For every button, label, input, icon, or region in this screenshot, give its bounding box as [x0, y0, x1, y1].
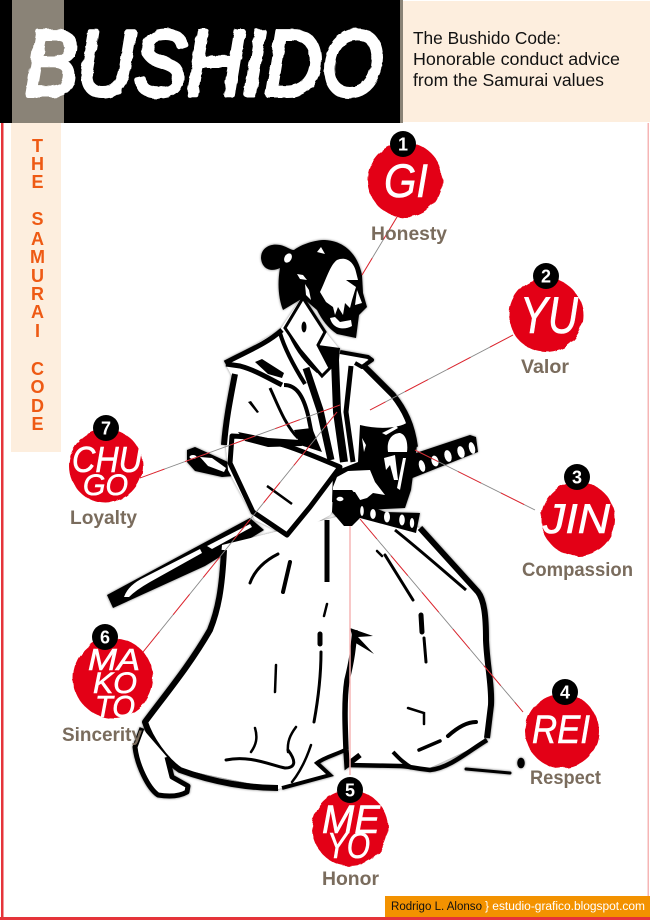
lapel strips: [280, 333, 305, 384]
nose highlight: [355, 290, 362, 305]
shoulder under-edge: [226, 364, 282, 385]
value 6: sincerity: 6: [100, 628, 110, 648]
label valor: Valor: [521, 356, 569, 378]
badge 4: [552, 679, 578, 705]
name rei: REI: [532, 708, 590, 752]
seal 2: [509, 278, 583, 352]
label sincerity: Sincerity: [62, 724, 142, 746]
label compassion: Compassion: [522, 559, 633, 581]
sleeve: [230, 432, 340, 535]
subtitle text: [413, 28, 620, 90]
connector lines: [140, 217, 535, 775]
label honor: Honor: [322, 868, 379, 890]
subtitle text: Honorable conduct advice: [413, 49, 620, 69]
face: [320, 259, 358, 315]
name me yo: ME: [322, 798, 381, 842]
hair highlights: [282, 252, 294, 264]
header banner: [0, 0, 400, 123]
badge 1: [390, 131, 416, 157]
value 6: sincerity: [62, 624, 153, 746]
subtitle text: from the Samurai values: [413, 70, 604, 90]
name makoto: MA: [88, 642, 140, 677]
head and hair: [261, 240, 367, 338]
value 4: respect: [525, 679, 601, 789]
value 2: valor: 2: [541, 266, 551, 286]
value 5: honor: [312, 777, 388, 890]
waist band: [332, 492, 420, 533]
seal 5: [312, 790, 388, 866]
samurai figure: [107, 240, 524, 796]
vertical title letters: H: [31, 154, 44, 174]
vertical panel: the samurai code: [11, 123, 61, 452]
inner fold: [270, 388, 298, 438]
black forearm: [332, 422, 417, 510]
vertical title letters: E: [31, 172, 44, 192]
left sword handle: [187, 447, 234, 477]
subtitle text: The Bushido Code:: [413, 28, 561, 48]
name makoto: [88, 642, 140, 724]
vertical title letters: R: [31, 284, 44, 304]
name chu go: [72, 439, 143, 502]
value 7: loyalty: 7: [101, 418, 111, 438]
subtitle panel: [400, 0, 650, 123]
label loyalty: Loyalty: [70, 507, 137, 529]
right lapel strip: [346, 366, 353, 462]
sheathed sword: [107, 518, 264, 608]
robe black folds: [248, 345, 340, 452]
vertical title letters: A: [31, 302, 44, 322]
author: Rodrigo L. Alonso: [391, 901, 482, 913]
hakama trousers: [135, 515, 524, 796]
label honesty: Honesty: [371, 223, 447, 245]
name me yo: YO: [327, 825, 370, 866]
badge 6: [92, 624, 118, 650]
value 3: compassion: 3: [572, 468, 582, 488]
centre diagonal strip: [306, 368, 331, 460]
badge 7: [93, 415, 119, 441]
seal 6: [73, 638, 153, 718]
name chu go: CHU: [72, 439, 143, 480]
seal 3: [541, 482, 615, 556]
right sword hilt: [410, 435, 478, 479]
value 1: honesty: 1: [398, 134, 408, 154]
name yu: YU: [520, 287, 578, 345]
footer credit: [385, 896, 650, 917]
chin highlight: [330, 317, 352, 328]
vertical title letters: E: [31, 414, 44, 434]
seal 1: [368, 142, 442, 218]
name chu go: GO: [83, 469, 128, 502]
name makoto: KO: [93, 667, 137, 700]
arm highlights: [362, 426, 407, 490]
name gi: GI: [384, 154, 428, 207]
grey brush band: [12, 0, 64, 123]
vertical title letters: A: [31, 229, 44, 249]
fold marks: [226, 551, 524, 782]
value 5: honor: 5: [345, 780, 355, 800]
vertical title letters: S: [31, 209, 44, 229]
robe outlines: [224, 330, 415, 462]
name jin: JIN: [542, 495, 611, 542]
hand: [333, 470, 385, 500]
value 4: respect: 4: [560, 682, 570, 702]
value 2: valor: [509, 263, 583, 378]
chest strip: [335, 360, 344, 462]
name me yo: [322, 798, 381, 866]
vertical title letters: O: [30, 377, 45, 397]
website: } estudio-grafico.blogspot.com: [485, 901, 645, 913]
vertical title letters: U: [31, 266, 44, 286]
neck: [285, 298, 330, 376]
badge 5: [337, 777, 363, 803]
value 7: loyalty: [69, 415, 143, 529]
vertical title letters: D: [31, 396, 44, 416]
neck mark: [302, 322, 306, 332]
name makoto: TO: [95, 689, 135, 724]
foot: [135, 728, 188, 796]
badge 3: [564, 464, 590, 490]
vertical title letters: T: [32, 136, 43, 156]
label respect: Respect: [530, 767, 601, 789]
title: BUSHIDO: [25, 13, 383, 115]
value 3: compassion: [522, 464, 633, 581]
value 1: honesty: [368, 131, 447, 245]
badge 2: [533, 263, 559, 289]
robe torso: [225, 300, 415, 537]
seal 7: [69, 429, 143, 503]
vertical title letters: I: [35, 321, 40, 341]
vertical title letters: C: [31, 359, 44, 379]
vertical title letters: M: [30, 247, 45, 267]
vertical title letters: [30, 136, 45, 434]
seal 4: [525, 694, 599, 768]
